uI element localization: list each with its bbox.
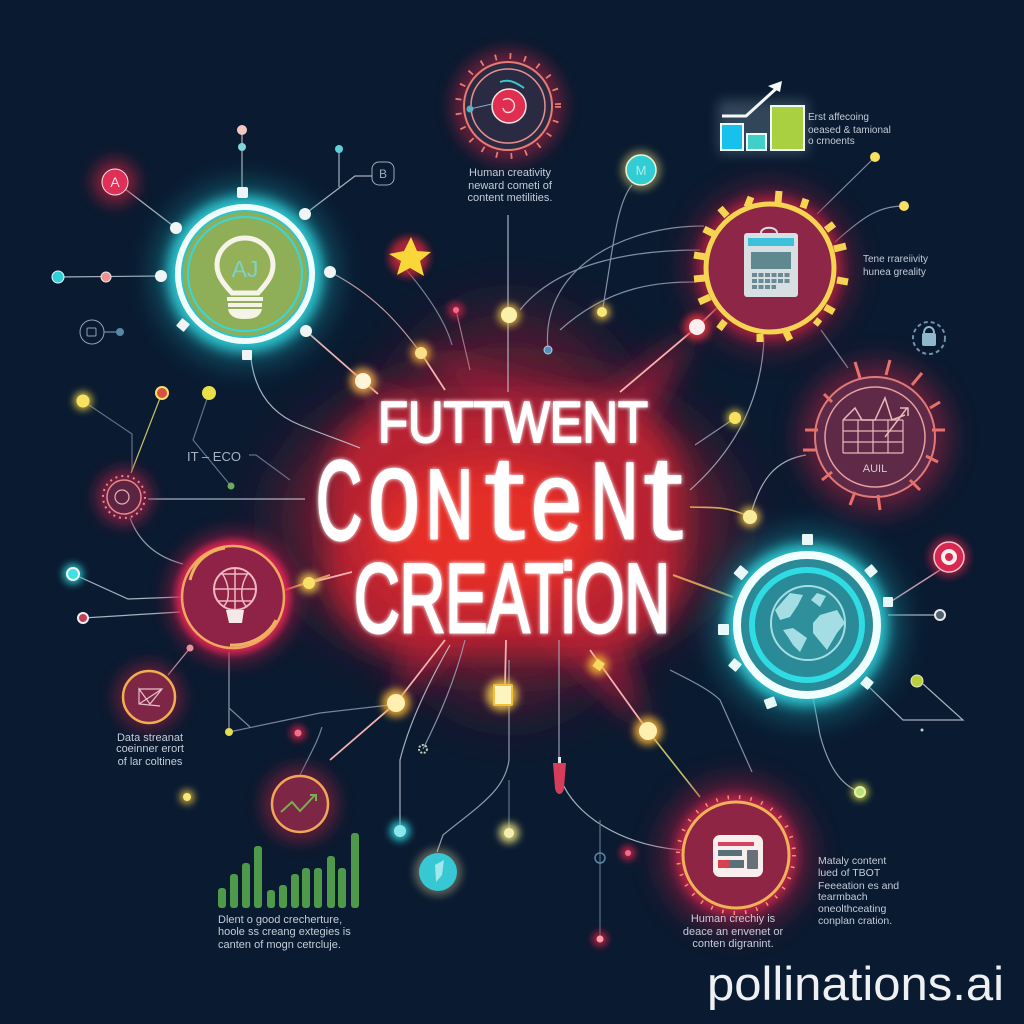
icon: lightbulb: AJ: [232, 256, 258, 282]
node: top target: [452, 50, 564, 162]
text: human creativity top: neward cometi of: [468, 180, 553, 192]
text: IT ECO label: IT – ECO: [187, 449, 241, 464]
text: right caption: Tene rrareiivity: [863, 254, 928, 265]
text: human creativity top: Human creativity: [469, 167, 551, 179]
text: bottom centre caption: Human crechiy is: [691, 913, 776, 925]
icon: letter M badge: [621, 150, 661, 190]
icon: small teal globe: [414, 848, 462, 896]
title: e: [531, 438, 582, 563]
node: trend: [262, 766, 338, 842]
title: CREATiON: [354, 543, 670, 653]
node: balloon globe: [165, 529, 301, 665]
text: top right caption: Erst affecoing: [808, 112, 869, 123]
node: globe: [711, 529, 903, 721]
text: bottom right caption: conplan cration.: [818, 915, 892, 927]
icon: earth: [771, 586, 845, 660]
icon: letter B badge: [372, 162, 394, 185]
glowing red connectors: [306, 305, 720, 760]
text: data caption: coeinner erort: [116, 743, 184, 755]
text: bottom right caption: lued of TBOT: [818, 867, 881, 879]
text: bottom centre caption: conten digranint.: [692, 938, 774, 950]
icon: trend line: [281, 795, 316, 812]
icon: balloon: [214, 568, 256, 623]
text: top right caption: oeased & tamional: [808, 125, 891, 136]
text: data caption: Data streanat: [117, 732, 183, 744]
node: calendar: [686, 184, 854, 352]
icon: envelope: [139, 689, 162, 706]
icon: star: [389, 237, 431, 277]
node: analytics chart: [801, 360, 949, 511]
icon: gear badge: [929, 537, 969, 577]
text: bottom right caption: Mataly content: [818, 855, 886, 867]
title: [316, 390, 683, 653]
icon: lightbulb: [217, 238, 273, 319]
title: t: [643, 431, 683, 565]
title: FUTTWENT: [378, 390, 648, 455]
text: human creativity top: content metilities.: [468, 192, 552, 204]
icon: lock: [913, 322, 945, 354]
node: small gear: [97, 470, 151, 524]
title: t: [484, 431, 525, 565]
node satellites: [155, 187, 336, 360]
watermark: pollinations.ai: [707, 957, 1004, 1010]
icon: letter A badge: A: [110, 174, 120, 190]
text: bottom centre caption: deace an envenet or: [683, 926, 783, 938]
title: o: [368, 421, 420, 567]
icon: growth bar chart: [718, 81, 808, 154]
icon: line chart: AUIL: [863, 463, 887, 475]
text: bottom right caption: tearmbach: [818, 891, 868, 903]
icon: letter B badge: B: [379, 167, 387, 181]
title: C: [316, 438, 362, 563]
text: bottom right caption: Feeeation es and: [818, 880, 899, 892]
icon: line chart: [843, 398, 908, 475]
connector lines: [58, 130, 963, 939]
central red glow: [280, 310, 730, 731]
text: bottom left caption: hoole ss creang extegies is: [218, 926, 351, 938]
node satellites: [718, 534, 893, 709]
node: envelope: [115, 663, 183, 731]
title: N: [426, 449, 473, 559]
text: bottom right caption: oneolthceating: [818, 903, 886, 915]
title: N: [591, 440, 638, 561]
icon: letter A badge: [93, 160, 137, 204]
text: data caption: of lar coltines: [118, 756, 183, 768]
glow dots: [52, 125, 945, 946]
node: AI lightbulb: [153, 182, 337, 366]
icon: letter M badge: M: [636, 163, 646, 178]
text: bottom left caption: canten of mogn cetrcluje.: [218, 939, 341, 951]
text: bottom left caption: Dlent o good crecherture,: [218, 914, 342, 926]
icon: calendar: [744, 228, 798, 297]
icon: pin bulb: [553, 757, 566, 794]
node: browser window: [660, 779, 812, 931]
icon: document badge: [80, 320, 124, 344]
text: top right caption: o crnoents: [808, 136, 855, 147]
icon: browser: [713, 835, 763, 877]
green bar chart: [218, 833, 359, 908]
text: right caption: hunea greality: [863, 267, 926, 278]
